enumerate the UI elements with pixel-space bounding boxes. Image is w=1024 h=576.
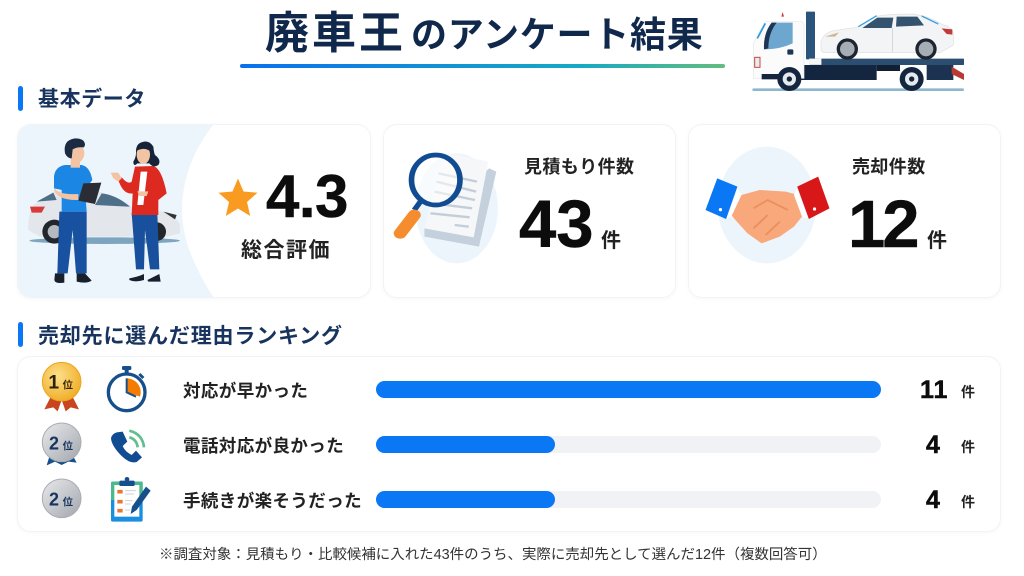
bar fill 1 <box>376 381 881 398</box>
panel: quote count <box>383 124 676 298</box>
unit 1: 件 <box>961 384 975 400</box>
panel: ranking <box>17 356 1001 532</box>
section bar: ranking <box>18 322 23 347</box>
icon: silver medal: 位 <box>63 437 74 452</box>
illustration background <box>17 124 214 298</box>
bar track 1 <box>376 381 881 398</box>
heading: ranking: 売却先に選んだ理由ランキング <box>38 325 343 348</box>
icon: silver medal <box>42 479 81 518</box>
icon: handshake <box>706 147 829 263</box>
icon: clipboard <box>111 477 151 522</box>
quote unit: 件 <box>601 230 621 252</box>
title: 廃車王 <box>265 9 406 58</box>
icon: silver medal <box>42 423 81 465</box>
icon: silver medal: 2 <box>49 433 59 453</box>
reason 1 label: 対応が早かった <box>183 381 308 401</box>
panel: sold count <box>688 124 1001 298</box>
sold value: 12 <box>848 187 917 262</box>
title underline <box>240 64 725 68</box>
illustration: two people and car <box>28 138 180 283</box>
icon: gold medal: 位 <box>63 377 74 392</box>
title <box>265 9 704 58</box>
icon: silver medal: 2 <box>49 489 59 509</box>
icon: gold medal: 1 <box>48 372 59 393</box>
rating label: 総合評価 <box>241 239 331 262</box>
sold unit: 件 <box>927 230 947 252</box>
quote value: 43 <box>519 187 594 262</box>
quote label: 見積もり件数 <box>524 157 634 177</box>
icon: silver medal: 位 <box>63 493 74 508</box>
reason 2 label: 電話対応が良かった <box>183 436 344 456</box>
reason 3 label: 手続きが楽そうだった <box>183 491 362 511</box>
unit 3: 件 <box>961 494 975 510</box>
icon: phone <box>111 431 144 462</box>
panel: overall rating <box>17 124 371 298</box>
value 2: 4 <box>926 431 940 459</box>
icon: magnifier and document <box>400 153 498 263</box>
bar fill 2 <box>376 436 555 453</box>
unit 2: 件 <box>961 439 975 455</box>
icon: gold medal <box>42 362 81 411</box>
icon: stopwatch <box>108 366 145 411</box>
bar fill 3 <box>376 491 555 508</box>
bar track 2 <box>376 436 881 453</box>
sold label: 売却件数 <box>852 157 926 177</box>
value 1: 11 <box>920 376 948 404</box>
footnote: ※調査対象：見積もり・比較候補に入れた43件のうち、実際に売却先として選んだ12件（複数回答可） <box>159 547 827 563</box>
icon: star <box>218 178 258 216</box>
heading: basic data: 基本データ <box>38 88 146 111</box>
bar track 3 <box>376 491 881 508</box>
title: のアンケート結果 <box>411 14 704 55</box>
value 3: 4 <box>926 486 940 514</box>
rating value: 4.3 <box>266 163 348 230</box>
illustration: tow truck carrying car <box>752 12 964 91</box>
section bar: basic data <box>18 86 23 111</box>
